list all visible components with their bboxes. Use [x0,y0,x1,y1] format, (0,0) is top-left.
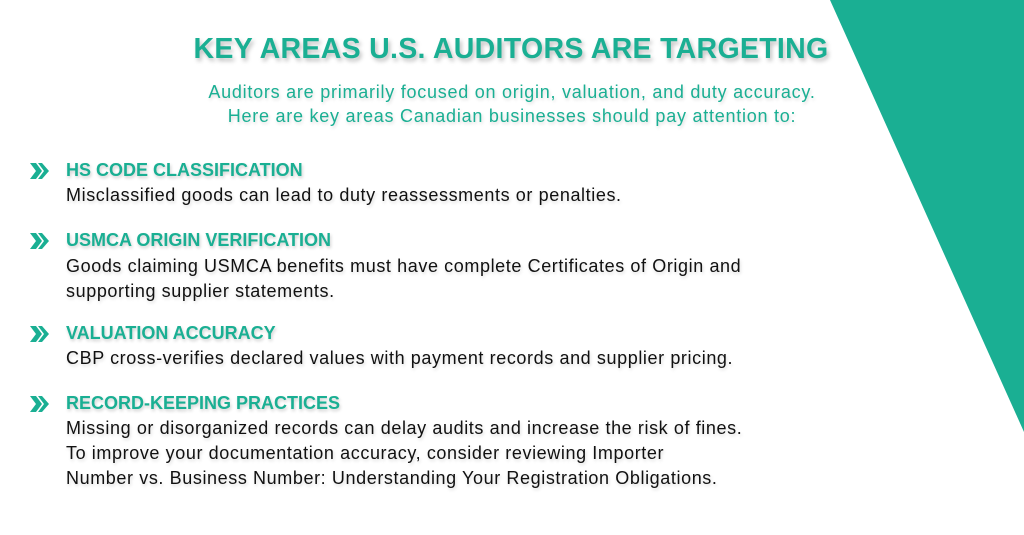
subtitle: Here are key areas Canadian businesses should pay attention to: [228,106,796,126]
icon: chevrons [30,396,49,412]
text: Goods claiming USMCA benefits must have complete Certificates of Origin and [66,256,741,276]
subtitle: Auditors are primarily focused on origin, valuation, and duty accuracy. [208,82,816,102]
item: HS code [30,160,622,208]
heading: USMCA ORIGIN VERIFICATION [66,230,331,250]
text [66,418,742,490]
icon: chevrons [30,163,49,179]
text: supporting supplier statements. [66,281,335,301]
item: record-keeping [30,393,742,490]
text: CBP cross-verifies declared values with payment records and supplier pricing. [66,348,733,368]
item: valuation [30,323,733,370]
heading: RECORD-KEEPING PRACTICES [66,393,340,413]
text [66,256,742,304]
item: USMCA [30,230,742,304]
icon: chevrons [30,233,49,249]
subtitle [208,82,816,128]
text: Missing or disorganized records can delay audits and increase the risk of fines. [66,418,742,438]
heading: HS CODE CLASSIFICATION [66,160,303,180]
text: Misclassified goods can lead to duty reassessments or penalties. [66,185,622,205]
text: To improve your documentation accuracy, consider reviewing Importer [66,443,664,463]
heading: VALUATION ACCURACY [66,323,276,343]
title: KEY AREAS U.S. AUDITORS ARE TARGETING [194,33,828,65]
text: Number vs. Business Number: Understanding Your Registration Obligations. [66,468,718,488]
icon: chevrons [30,326,49,342]
